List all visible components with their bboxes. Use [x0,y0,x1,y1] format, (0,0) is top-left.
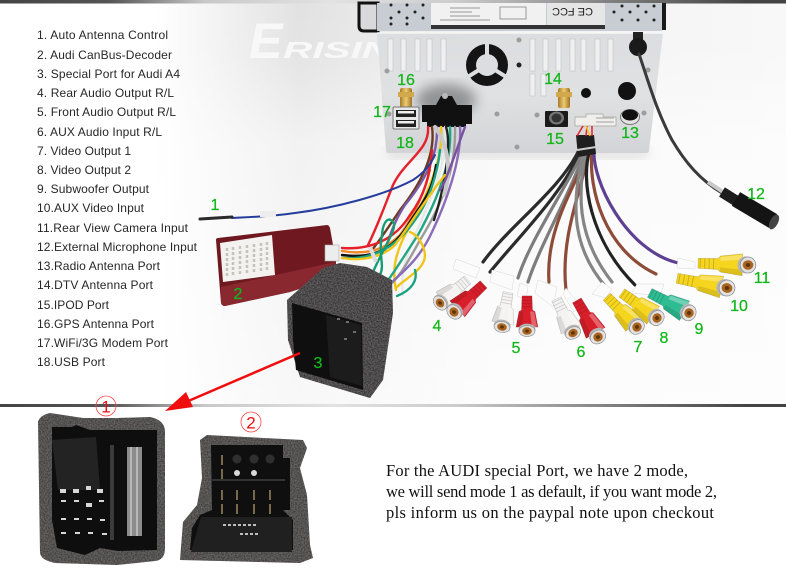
green callout numbers: 2 [234,286,243,303]
circled 2 [241,412,261,432]
port list: 1. Auto Antenna Control [37,28,168,42]
icon: GPS antenna connector [398,88,414,108]
icon: USB ports [393,107,419,129]
right wire bundle [483,126,678,290]
icon: main harness connector [422,93,472,127]
port list: 15.IPOD Port [37,298,110,312]
audi connector foam [287,263,393,398]
port list: 14.DTV Antenna Port [37,278,154,292]
green callout numbers: 13 [621,125,639,142]
note text: we will send mode 1 as default, if you want mode 2, [386,482,717,501]
red arrow [165,353,300,411]
top plate: CE FCC [552,5,593,17]
green callout numbers: 14 [544,71,562,88]
watermark: E [249,13,284,69]
rca plug: 11 yellow [698,252,756,276]
icon: microphone grommet [629,32,647,56]
icon: DTV antenna connector [556,88,572,108]
soft shadow [388,148,648,158]
port list: 2. Audi CanBus-Decoder [37,48,172,62]
right bracket [661,3,666,30]
divider [0,404,786,407]
rca plug: 6 white [547,294,585,343]
port list: 17.WiFi/3G Modem Port [37,336,169,350]
green callout numbers: 1 [211,197,220,214]
decoder box [216,225,339,306]
green callout numbers: 17 [373,104,391,121]
fan grille [466,41,508,86]
green callout numbers: 8 [660,330,669,347]
black sleeve [576,135,596,157]
rca plug: 4 white [429,271,475,315]
left wire harness [342,127,465,296]
green callout numbers: 16 [397,72,415,89]
green callout numbers: 12 [747,186,765,203]
port list: 10.AUX Video Input [37,201,145,215]
tags [453,258,695,312]
circled 1: 1 [101,398,111,416]
green callout numbers: 5 [512,340,521,357]
rca plug: 5 red [516,296,538,336]
port list: 12.External Microphone Input [37,240,198,254]
green callout numbers: 9 [695,321,704,338]
watermark [249,13,392,69]
icon: iPod port [545,111,568,127]
head unit [359,3,666,158]
connector mode 1 [38,413,165,565]
bundle wires [483,150,678,290]
rear panel [377,33,663,153]
rca plug: 7 yellow [599,289,649,339]
rca plug: 6 red [567,295,611,348]
green callout numbers: 3 [314,355,323,372]
icon: round port [618,82,636,100]
green callout numbers: 4 [433,318,442,335]
pin rows [222,455,270,514]
note text: For the AUDI special Port, we have 2 mode, [386,461,688,480]
mounting bracket [359,3,378,31]
green callout numbers [211,71,770,372]
port list: 8. Video Output 2 [37,163,131,177]
port list: 9. Subwoofer Output [37,182,150,196]
rca plug: 4 red [442,276,491,324]
green callout numbers: 6 [577,344,586,361]
green callout numbers: 15 [546,131,564,148]
rca plug: 9 green [645,283,700,326]
connector shadow [416,84,476,116]
port list: 16.GPS Antenna Port [37,317,155,331]
green callout numbers: 11 [754,270,770,287]
pin grid [60,486,107,535]
port list [37,28,198,369]
circled 2: 2 [246,414,256,432]
watermark: RISIN [283,37,392,63]
green callout numbers: 7 [634,339,643,356]
port list: 18.USB Port [37,355,106,369]
circled 1 [96,396,116,416]
microphone cable [639,54,781,231]
cable tie [370,247,376,262]
port list: 6. AUX Audio Input R/L [37,125,162,139]
icon: radio antenna socket [620,110,640,124]
rca plug: 10 yellow [675,267,737,300]
blue antenna control wire [200,155,435,219]
rca plug: 8 yellow [615,284,669,331]
port list: 4. Rear Audio Output R/L [37,86,174,100]
port list: 3. Special Port for Audi A4 [37,67,180,81]
harness wires [342,127,465,296]
port list: 5. Front Audio Output R/L [37,105,176,119]
note text [386,461,717,522]
note text: pls inform us on the paypal note upon checkout [386,503,714,522]
rca plug: 5 white [490,291,519,334]
port list: 11.Rear View Camera Input [37,221,189,235]
connector mode 2 [180,435,313,563]
green callout numbers: 10 [730,298,748,315]
green callout numbers: 18 [396,135,414,152]
top plate [377,3,662,31]
top rule [0,0,786,4]
icon: white multi-pin connector [575,114,616,126]
port list: 13.Radio Antenna Port [37,259,161,273]
vent slots [388,39,613,96]
port list: 7. Video Output 1 [37,144,131,158]
